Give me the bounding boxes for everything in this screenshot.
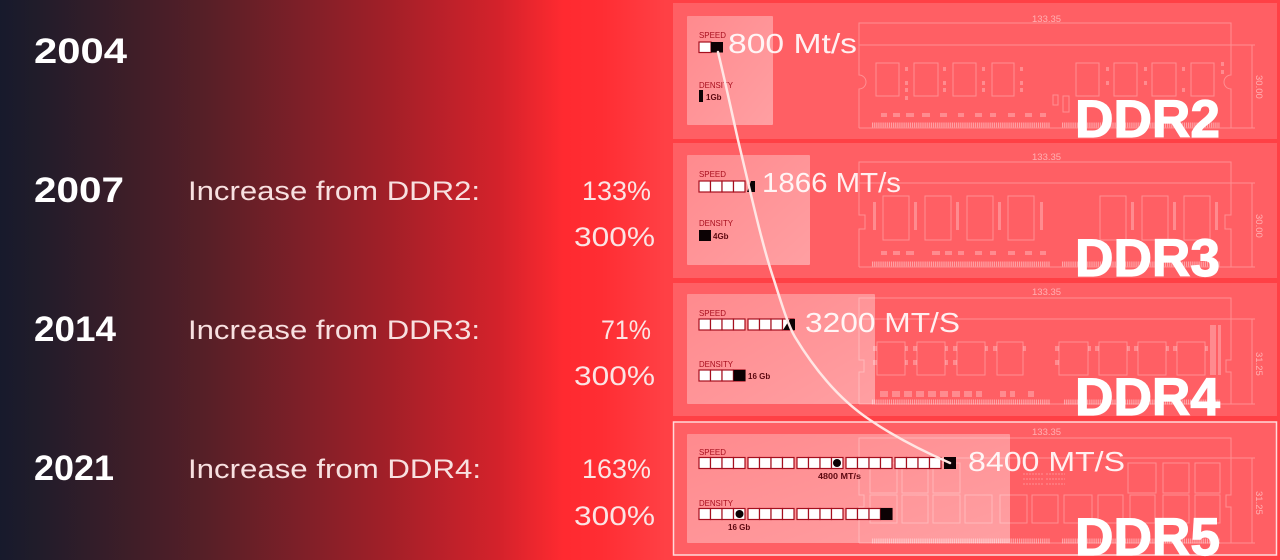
density bar [699,508,892,520]
dimension height: 31.25 [1253,352,1264,376]
speed label: SPEED [699,169,726,179]
density value: 4Gb [713,232,729,241]
density value: 1Gb [706,93,722,102]
panel: DDR2 [673,3,1277,149]
model name: DDR4 [1075,368,1221,427]
module diagram DDR4 [859,287,1264,404]
speed label: SPEED [699,308,726,318]
year 2004: 2004 [34,32,128,71]
info box DDR3 [687,155,810,265]
model name: DDR3 [1075,229,1220,288]
density bar [699,230,711,241]
density bar [699,90,703,102]
panel: DDR4 [673,283,1277,427]
speed value: 1866 MT/s [762,167,901,198]
dimension width: 133.35 [1032,287,1061,298]
growth curve [718,52,950,463]
panel: DDR5 [674,422,1276,560]
module diagram DDR5 [859,427,1264,543]
timeline row: 2007 [34,171,655,252]
info box DDR2 [687,16,773,125]
dimension height: 30.00 [1253,214,1264,238]
year 2007: 2007 [34,171,124,210]
dimension width: 133.35 [1032,152,1061,163]
marker: 16 Gb [736,510,744,518]
dimension height: 31.25 [1253,491,1264,515]
dimension width: 133.35 [1032,14,1061,25]
timeline row: 2021 [34,449,655,531]
model name: DDR2 [1075,90,1220,149]
speed value: 3200 MT/S [805,307,960,338]
increase label DDR3: Increase from DDR3: [188,315,480,345]
speed bar [699,42,723,52]
speed increase 71%: 71% [601,315,651,345]
info box DDR4 [687,294,875,404]
speed bar [699,319,795,330]
speed bar [699,457,956,469]
speed value: 800 Mt/s [728,28,857,59]
density label: DENSITY [699,80,733,90]
module diagram DDR2 [859,14,1264,128]
speed value: 8400 MT/S [968,446,1125,477]
dimension width: 133.35 [1032,427,1061,438]
density increase 300%: 300% [574,222,655,252]
year 2021: 2021 [34,449,114,488]
speed increase 133%: 133% [582,176,651,206]
info box DDR5 [687,434,1010,543]
density increase 300%: 300% [574,361,655,391]
panel: DDR3 [673,143,1277,288]
density label: DENSITY [699,359,733,369]
density bar [699,370,746,381]
timeline row: 2014 [34,310,655,391]
marker: 4800 MT/s [833,459,841,467]
speed label: SPEED [699,30,726,40]
speed increase 163%: 163% [582,454,651,484]
increase label DDR2: Increase from DDR2: [188,176,480,206]
density value: 16 Gb [748,372,770,381]
density label: DENSITY [699,498,733,508]
base density value: 16 Gb [728,523,750,532]
module diagram DDR3 [859,152,1264,267]
density label: DENSITY [699,218,733,228]
speed label: SPEED [699,447,726,457]
density increase 300%: 300% [574,501,655,531]
dimension height: 30.00 [1253,75,1264,99]
base speed value: 4800 MT/s [818,472,862,481]
year 2014: 2014 [34,310,117,349]
speed bar [699,181,755,192]
increase label DDR4: Increase from DDR4: [188,454,481,484]
